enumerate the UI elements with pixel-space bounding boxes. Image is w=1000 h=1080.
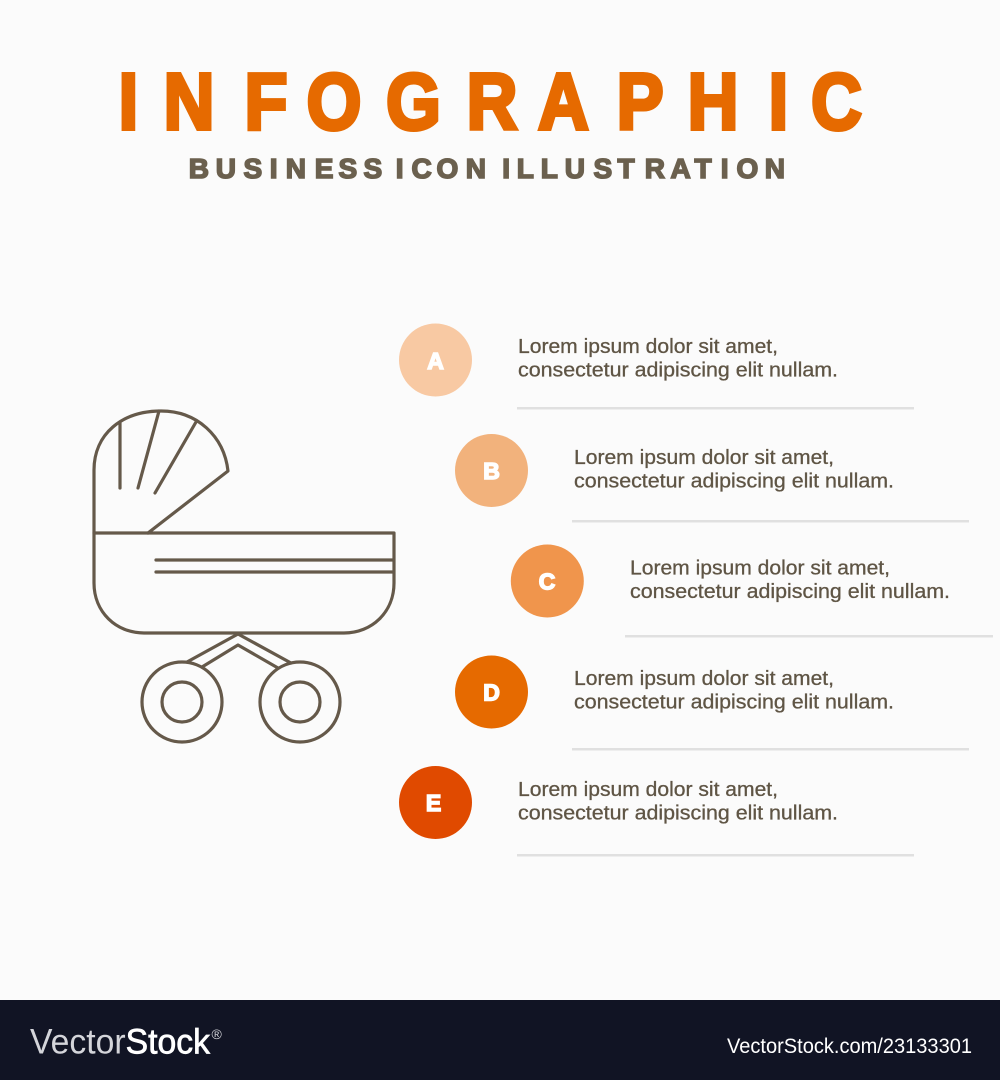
text B [574, 447, 894, 492]
letter E: E [426, 790, 441, 816]
letter D: D [483, 680, 500, 706]
footer bar [0, 1000, 1000, 1080]
text E: Lorem ipsum dolor sit amet, [518, 779, 778, 801]
badge B [455, 434, 528, 507]
text D [574, 668, 894, 714]
text C: consectetur adipiscing elit nullam. [630, 581, 950, 603]
right wheel [260, 662, 340, 742]
item A [399, 324, 914, 410]
item E [399, 766, 914, 856]
text B: consectetur adipiscing elit nullam. [574, 470, 894, 492]
text A: consectetur adipiscing elit nullam. [518, 360, 838, 382]
text C [630, 558, 950, 603]
left wheel [142, 662, 222, 742]
icon: baby stroller [94, 411, 394, 742]
badge E [399, 766, 472, 839]
text C: Lorem ipsum dolor sit amet, [630, 558, 890, 580]
footer logo: VectorStock [30, 1022, 210, 1062]
body stripes [156, 560, 393, 572]
canopy ribs [120, 411, 196, 493]
item D [455, 656, 969, 750]
letter C: C [539, 568, 555, 594]
stroller legs [187, 634, 291, 668]
text A [518, 336, 838, 382]
stroller body [94, 533, 394, 633]
text E: consectetur adipiscing elit nullam. [518, 802, 838, 824]
text D: Lorem ipsum dolor sit amet, [574, 668, 834, 690]
title: INFOGRAPHIC [119, 57, 862, 146]
stroller canopy [94, 411, 228, 533]
footer url: VectorStock.com/23133301 [727, 1035, 972, 1058]
letter B: B [483, 458, 500, 484]
item C [511, 544, 993, 638]
text B: Lorem ipsum dolor sit amet, [574, 447, 834, 469]
letter A: A [427, 348, 444, 374]
badge D [455, 656, 528, 728]
badge C [511, 544, 584, 618]
badge A [399, 324, 472, 396]
registered mark: ® [212, 1026, 222, 1042]
subtitle: BUSINESS ICON ILLUSTRATION [189, 153, 785, 184]
item B [455, 434, 969, 522]
text A: Lorem ipsum dolor sit amet, [518, 336, 778, 358]
text E [518, 779, 838, 824]
text D: consectetur adipiscing elit nullam. [574, 692, 894, 714]
